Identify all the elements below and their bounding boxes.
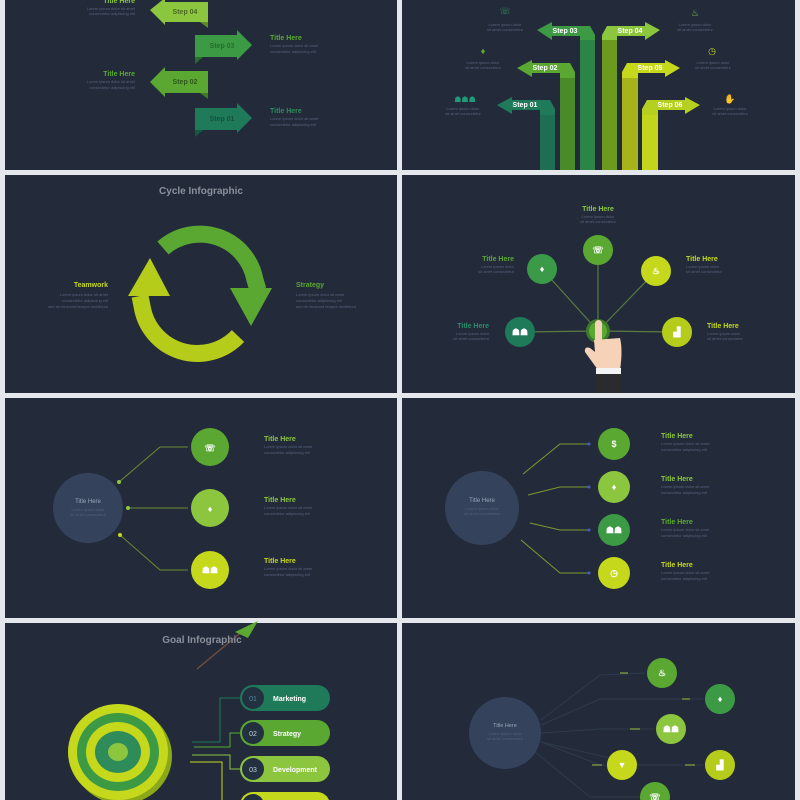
nodes: ☗☗ xyxy=(606,525,622,535)
arrow step 01 xyxy=(195,103,252,137)
titles: Title Here xyxy=(264,558,296,565)
titles: sit amet consectetur xyxy=(580,219,617,224)
nodes: ▟ xyxy=(716,759,725,771)
titles: consectetur adipiscing elit xyxy=(661,490,708,495)
ribbons: Step 06 xyxy=(658,102,683,109)
pills: 01 xyxy=(249,696,257,703)
titles: consectetur adipiscing elit xyxy=(264,450,311,455)
nodes: ▼ xyxy=(618,760,626,770)
text blocks: Lorem ipsum dolor sit amet xyxy=(87,79,136,84)
icons and labels: ☗☗☗ xyxy=(454,95,476,104)
text blocks: Title Here xyxy=(270,108,302,115)
arrow step 02: Step 02 xyxy=(173,79,198,86)
titles: consectetur adipiscing elit xyxy=(661,533,708,538)
center circle: Title Here xyxy=(75,499,102,505)
cycle arrows xyxy=(128,234,272,353)
center circle xyxy=(53,473,123,543)
center circle: Lorem ipsum dolor xyxy=(465,506,499,511)
titles: Title Here xyxy=(707,323,739,330)
center circle: Title Here xyxy=(493,723,517,729)
pills: Marketing xyxy=(273,696,306,703)
titles: consectetur adipiscing elit xyxy=(264,572,311,577)
text: strategy: Lorem ipsum dolor sit amet xyxy=(296,292,345,297)
nodes: ♨ xyxy=(658,668,666,678)
icons and labels: sit amet consectetur xyxy=(695,65,732,70)
titles: Lorem ipsum dolor xyxy=(456,331,490,336)
nodes: ▟ xyxy=(673,326,682,338)
pills: 02 xyxy=(249,731,257,738)
titles: Title Here xyxy=(661,476,693,483)
text: strategy xyxy=(296,282,357,309)
icons and labels: sit amet consectetur xyxy=(465,65,502,70)
text: strategy: consectetur adipiscing elit xyxy=(296,298,343,303)
titles: Lorem ipsum dolor xyxy=(707,331,741,336)
text blocks: consectetur adipiscing elit xyxy=(270,122,317,127)
text: teamwork: Lorem ipsum dolor sit amet xyxy=(60,292,109,297)
icon: hand xyxy=(585,320,622,393)
center circle: Lorem ipsum dolor xyxy=(71,507,105,512)
arrow step 01: Step 01 xyxy=(210,116,235,123)
text blocks: consectetur adipiscing elit xyxy=(270,49,317,54)
nodes xyxy=(598,428,630,589)
icons and labels: ◷ xyxy=(708,46,716,56)
icons and labels: ♦ xyxy=(481,46,486,56)
title: Cycle Infographic xyxy=(159,186,243,197)
arrow step 03: Step 03 xyxy=(210,43,235,50)
nodes: ♨ xyxy=(652,266,660,276)
nodes: ☗☗ xyxy=(202,565,218,575)
ribbons: Step 04 xyxy=(618,28,643,35)
titles: Title Here xyxy=(686,256,718,263)
titles: Lorem ipsum dolor sit amet xyxy=(264,566,313,571)
panel: ribbon arrows xyxy=(402,0,795,170)
nodes: ◷ xyxy=(610,568,618,578)
text blocks: Title Here xyxy=(103,71,135,78)
panel: three-node hub xyxy=(5,398,397,618)
dart xyxy=(197,621,258,669)
center circle: sit amet consectetur xyxy=(70,512,107,517)
nodes: ♦ xyxy=(208,504,213,514)
icons and labels xyxy=(445,6,749,116)
icons and labels: Lorem ipsum dolor xyxy=(466,60,500,65)
ribbons: Step 05 xyxy=(638,65,663,72)
text blocks: Lorem ipsum dolor sit amet xyxy=(87,6,136,11)
titles: Lorem ipsum dolor sit amet xyxy=(264,444,313,449)
titles: Lorem ipsum dolor sit amet xyxy=(661,441,710,446)
pills: Development xyxy=(273,767,318,774)
text: strategy: Strategy xyxy=(296,282,324,289)
target xyxy=(68,704,172,800)
ribbons: Step 01 xyxy=(513,102,538,109)
text: teamwork: consectetur adipiscing elit xyxy=(62,298,109,303)
pills: 03 xyxy=(249,767,257,774)
nodes: $ xyxy=(611,439,617,449)
titles: Lorem ipsum dolor sit amet xyxy=(264,505,313,510)
titles xyxy=(453,206,743,341)
center circle: sit amet consectetur xyxy=(487,736,524,741)
nodes xyxy=(191,428,229,589)
nodes xyxy=(505,235,692,347)
titles: Title Here xyxy=(661,433,693,440)
icons and labels: Lorem ipsum dolor xyxy=(446,106,480,111)
icons and labels: sit amet consectetur xyxy=(677,27,714,32)
center circle: Lorem ipsum dolor xyxy=(488,731,522,736)
nodes: ♦ xyxy=(612,482,617,492)
panel: four-node hub xyxy=(402,398,795,618)
ribbons: Step 02 xyxy=(533,65,558,72)
icons and labels: ☏ xyxy=(499,6,511,16)
nodes: ☏ xyxy=(592,245,604,255)
titles: Title Here xyxy=(457,323,489,330)
arrow step 03 xyxy=(195,30,252,64)
titles: Title Here xyxy=(582,206,614,213)
icons and labels: Lorem ipsum dolor xyxy=(678,22,712,27)
icons and labels: Lorem ipsum dolor xyxy=(488,22,522,27)
titles: Title Here xyxy=(264,436,296,443)
icons and labels: ✋ xyxy=(724,93,736,104)
text blocks: Lorem ipsum dolor sit amet xyxy=(270,43,319,48)
panel: step arrows xyxy=(5,0,397,170)
text blocks: consectetur adipiscing elit xyxy=(89,11,136,16)
panel: goal infographic xyxy=(5,621,397,800)
pills: Strategy xyxy=(273,731,301,738)
titles: Lorem ipsum dolor xyxy=(481,264,515,269)
icons and labels: Lorem ipsum dolor xyxy=(696,60,730,65)
text: strategy: sed do eiusmod tempor incididunt xyxy=(296,304,357,309)
titles: Lorem ipsum dolor xyxy=(581,214,615,219)
center circle xyxy=(445,471,519,545)
nodes xyxy=(607,658,735,800)
text: teamwork xyxy=(48,282,109,309)
nodes: ☗☗ xyxy=(512,327,528,337)
titles: Title Here xyxy=(482,256,514,263)
panel: cycle infographic xyxy=(5,175,397,393)
arrow step 04 xyxy=(150,0,208,28)
text: teamwork: sed do eiusmod tempor incididunt xyxy=(48,304,109,309)
title: Goal Infographic xyxy=(162,635,242,646)
text blocks: Lorem ipsum dolor sit amet xyxy=(270,116,319,121)
text blocks: Title Here xyxy=(270,35,302,42)
arrow step 04: Step 04 xyxy=(173,9,198,16)
titles: Lorem ipsum dolor sit amet xyxy=(661,484,710,489)
text blocks: consectetur adipiscing elit xyxy=(89,85,136,90)
panel: hand hub xyxy=(402,175,795,393)
titles: Title Here xyxy=(661,562,693,569)
titles: Lorem ipsum dolor sit amet xyxy=(661,570,710,575)
panel: six-node hub xyxy=(402,623,795,800)
icons and labels: sit amet consectetur xyxy=(712,111,749,116)
titles: sit amet consectetur xyxy=(453,336,490,341)
titles: Lorem ipsum dolor sit amet xyxy=(661,527,710,532)
titles: Title Here xyxy=(661,519,693,526)
nodes: ♦ xyxy=(718,694,723,704)
center circle: Title Here xyxy=(469,498,496,504)
center circle: sit amet consectetur xyxy=(464,511,501,516)
titles: sit amet consectetur xyxy=(686,269,722,274)
titles xyxy=(264,436,313,577)
center circle xyxy=(469,697,541,769)
arrow step 02 xyxy=(150,67,208,99)
nodes: ☏ xyxy=(204,443,216,453)
titles: sit amet consectetur xyxy=(478,269,515,274)
ribbons xyxy=(497,22,700,170)
titles: consectetur adipiscing elit xyxy=(264,511,311,516)
titles: consectetur adipiscing elit xyxy=(661,447,708,452)
icons and labels: sit amet consectetur xyxy=(445,111,482,116)
icons and labels: Lorem ipsum dolor xyxy=(713,106,747,111)
pills xyxy=(240,685,330,800)
text: teamwork: Teamwork xyxy=(74,282,108,289)
titles xyxy=(661,433,710,581)
text blocks xyxy=(87,0,319,127)
titles: sit amet consectetur xyxy=(707,336,743,341)
titles: Lorem ipsum dolor xyxy=(686,264,720,269)
nodes: ♦ xyxy=(540,264,545,274)
icons and labels: sit amet consectetur xyxy=(487,27,524,32)
titles: consectetur adipiscing elit xyxy=(661,576,708,581)
ribbons: Step 03 xyxy=(553,28,578,35)
nodes: ☗☗ xyxy=(663,724,679,734)
titles: Title Here xyxy=(264,497,296,504)
icons and labels: ♨ xyxy=(691,8,699,18)
